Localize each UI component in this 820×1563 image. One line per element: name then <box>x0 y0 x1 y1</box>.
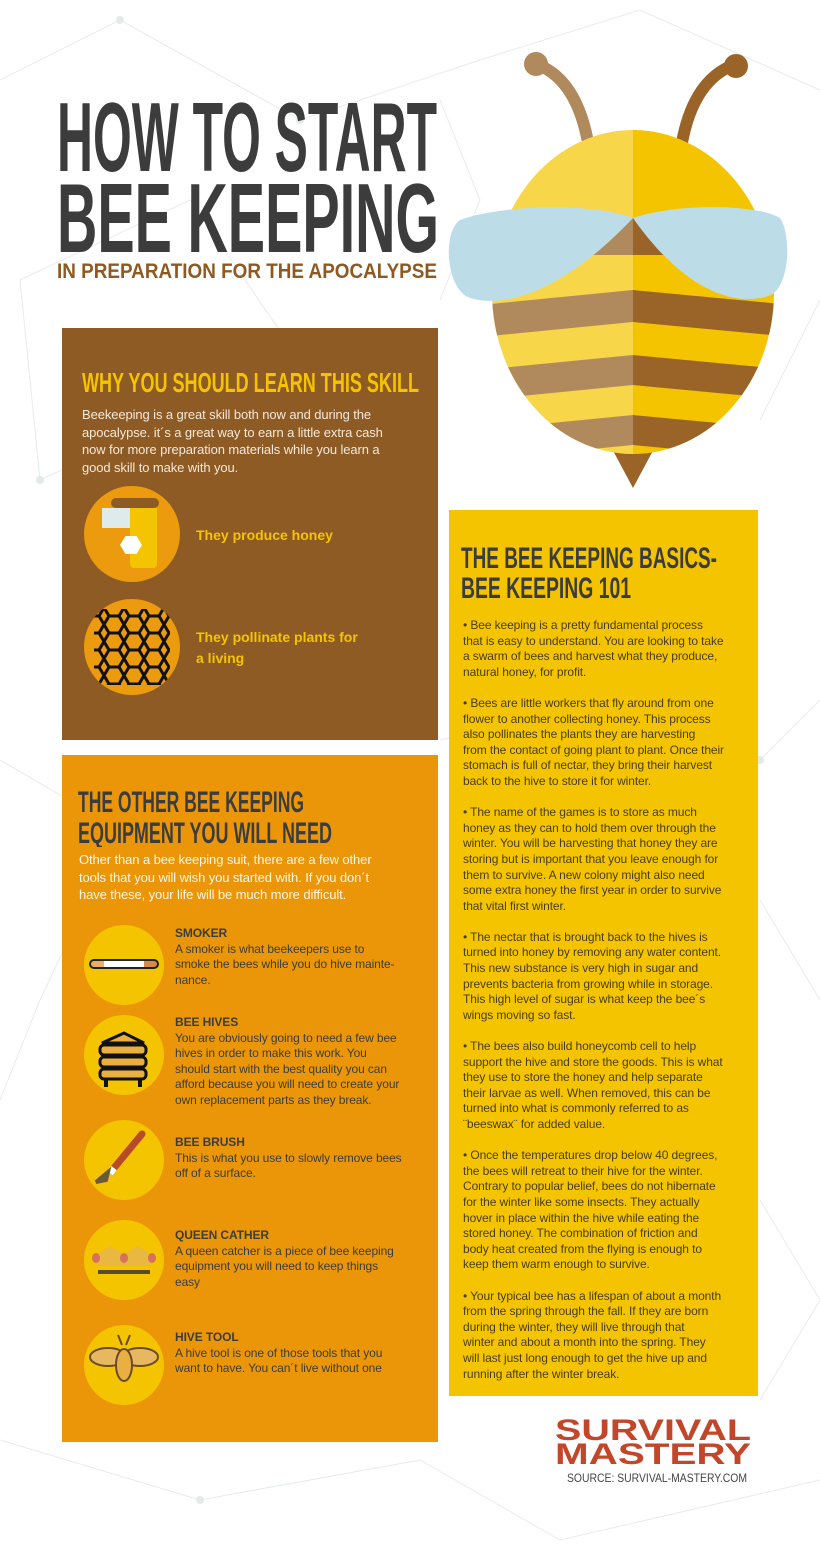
text: bullets: This new substance is very high in sugar and <box>463 961 698 975</box>
icon: honey jar <box>84 486 180 582</box>
item: bee hives: You are obviously going to need a few bee <box>175 1030 397 1044</box>
text: bullets: prevents bacteria from growing while in storage. <box>463 977 713 991</box>
item: smoker <box>84 925 394 1005</box>
text: bullets: them to survive. A new colony might also need <box>463 868 705 882</box>
text: bullets: • Once the temperatures drop below 40 degrees, <box>463 1148 717 1162</box>
panel: why you should learn <box>62 328 438 740</box>
text: bullets <box>463 618 724 1380</box>
logo: survival mastery: SURVIVAL <box>555 1414 751 1447</box>
text: bullets: flower to another collecting honey. This process <box>463 712 711 726</box>
text: bullets: also pollinates the plants they are harvesting <box>463 727 695 741</box>
text: bullets: from the contact of going plant to plant. Once their <box>463 743 724 757</box>
text: intro: tools that you will wish you started with. If you don´t <box>79 870 369 884</box>
item: bee hives: should start with the best quality you can <box>175 1062 387 1076</box>
item: bee hives: own replacement parts as they break. <box>175 1092 372 1106</box>
title <box>57 95 439 283</box>
item: bee hives: BEE HIVES <box>175 1015 238 1029</box>
logo: survival mastery: MASTERY <box>555 1438 751 1471</box>
text: bullets: honey as they can to hold them over through the <box>463 821 716 835</box>
panel: other equipment <box>62 755 438 1442</box>
text: bullets: • The nectar that is brought back to the hives is <box>463 930 708 944</box>
panel: basics <box>449 510 758 1396</box>
text: bullets: support the hive and store the goods. This is what <box>463 1055 723 1069</box>
heading: other equipment <box>78 786 332 847</box>
logo: survival mastery <box>555 1414 751 1485</box>
text: they produce honey: They produce honey <box>196 527 333 543</box>
item: bee brush: This is what you use to slowly remove bees <box>175 1150 402 1164</box>
item: smoker: A smoker is what beekeepers use to <box>175 942 364 956</box>
text: bullets: from the spring through the fall. If they are born <box>463 1304 708 1318</box>
text: bullets: • Bee keeping is a pretty fundamental process <box>463 618 703 632</box>
text: bullets: Contrary to popular belief, bees do not hibernate <box>463 1179 716 1193</box>
item: hive tool <box>84 1325 382 1405</box>
illustration: bee <box>448 52 788 488</box>
text: bullets: • The bees also build honeycomb cell to help <box>463 1039 696 1053</box>
text: bullets: a swarm of bees and harvest what they produce, <box>463 649 717 663</box>
text: they pollinate plants <box>196 629 358 666</box>
text: they pollinate plants: They pollinate plants for <box>196 629 358 645</box>
item: hive tool: A hive tool is one of those tools that you <box>175 1346 382 1360</box>
item: queen catcher: QUEEN CATHER <box>175 1228 269 1242</box>
item: queen catcher: easy <box>175 1274 200 1288</box>
text: bullets: • The name of the games is to store as much <box>463 805 697 819</box>
text: bullets: stomach is full of nectar, they bring their harvest <box>463 758 712 772</box>
text: bullets: keep them warm enough to survive. <box>463 1257 650 1271</box>
text: bullets: natural honey, for profit. <box>463 665 586 679</box>
item: hive tool: HIVE TOOL <box>175 1330 239 1344</box>
text: intro: have these, your life will be much more difficult. <box>79 887 346 902</box>
item: bee brush <box>84 1120 402 1200</box>
item: smoker: nance. <box>175 972 210 986</box>
text: bullets: stored honey. The combination of friction and <box>463 1226 698 1240</box>
text: bullets: that vital first winter. <box>463 899 566 913</box>
text: bullets: • Bees are little workers that fly around from one <box>463 696 714 710</box>
text: bullets: they use to store the honey and help separate <box>463 1070 703 1084</box>
text: bullets: ¨beeswax¨ for added value. <box>463 1117 605 1131</box>
text: bullets: body heat created from the flying is enough to <box>463 1242 702 1256</box>
text: bullets: back to the hive to store it for winter. <box>463 774 651 788</box>
text: intro: good skill to make with you. <box>82 460 238 474</box>
text: bullets: their larvae as well. When removed, this can be <box>463 1086 710 1100</box>
item: bee brush: BEE BRUSH <box>175 1135 245 1149</box>
item: bee hives: afford because you will need to create your <box>175 1077 399 1091</box>
text: bullets: storing but is important that you leave enough for <box>463 852 718 866</box>
text: bullets: turned into what is commonly referred to as <box>463 1101 689 1115</box>
item: queen catcher: A queen catcher is a piece of bee keeping <box>175 1244 394 1258</box>
text: bullets: wings moving so fast. <box>463 1008 576 1022</box>
text: bullets: that is easy to understand. You are looking to take <box>463 634 723 648</box>
item: smoker: smoke the bees while you do hive mainte- <box>175 957 394 971</box>
text: bullets: • Your typical bee has a lifespan of about a month <box>463 1289 721 1303</box>
text: bullets: during the winter, they will live through that <box>463 1320 685 1334</box>
text: bullets: running after the winter break. <box>463 1366 619 1380</box>
item: bee hives <box>84 1015 400 1106</box>
text: bullets: hover in place within the hive while eating the <box>463 1211 699 1225</box>
text: bullets: the bees will retreat to their hive for the winter. <box>463 1164 703 1178</box>
text: bullets: will last just long enough to get the hive up and <box>463 1351 707 1365</box>
text: bullets: some extra honey the first year in order to survive <box>463 883 721 897</box>
item: queen catcher: equipment you will need to keep things <box>175 1259 378 1273</box>
item: smoker: SMOKER <box>175 926 227 940</box>
item: queen catcher <box>84 1220 394 1300</box>
text: bullets: turned into honey by removing any water content. <box>463 945 721 959</box>
text: bullets: winter and about a month into the spring. They <box>463 1335 706 1349</box>
item: hive tool: want to have. You can´t live without one <box>175 1361 382 1375</box>
text: intro <box>79 852 372 902</box>
text: intro: Beekeeping is a great skill both now and during the <box>82 407 371 422</box>
text: bullets: winter. You will be harvesting that honey they are <box>463 836 718 850</box>
heading: basics <box>461 542 717 604</box>
icon: honeycomb <box>84 599 180 695</box>
item: bee brush: off of a surface. <box>175 1166 256 1180</box>
text: bullets: This high level of sugar is what keep the bee´s <box>463 992 705 1006</box>
item: bee hives: hives in order to make this work. You <box>175 1046 367 1060</box>
text: bullets: for the winter like some insects. They actually <box>463 1195 700 1209</box>
text: intro <box>82 407 383 474</box>
text: intro: Other than a bee keeping suit, there are a few other <box>79 852 372 867</box>
text: intro: apocalypse. it´s a great way to earn a little extra cash <box>82 424 383 440</box>
text: intro: now for more preparation materials while you learn a <box>82 442 380 457</box>
text: they pollinate plants: a living <box>196 650 244 666</box>
